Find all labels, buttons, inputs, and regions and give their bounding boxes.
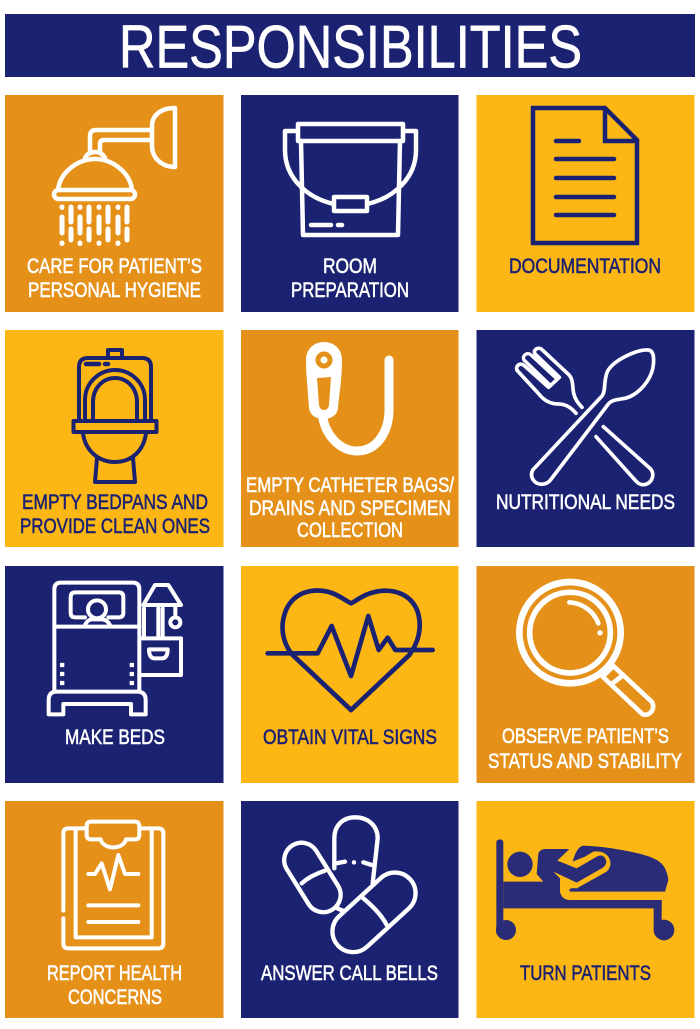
icon: clipboard xyxy=(63,822,163,948)
label: PROVIDE CLEAN ONES xyxy=(20,515,210,538)
panel: room preparation xyxy=(241,95,458,312)
icon: catheter xyxy=(306,342,389,451)
panel: bedpans xyxy=(5,330,224,547)
panel: nutritional needs xyxy=(476,330,694,547)
icon: patient in bed xyxy=(496,839,674,940)
label: PREPARATION xyxy=(291,279,409,302)
panel: report health concerns xyxy=(5,801,224,1018)
label xyxy=(488,725,682,773)
icon: fork and spoon xyxy=(517,348,654,485)
label: CARE FOR PATIENT’S xyxy=(27,255,202,278)
label: EMPTY CATHETER BAGS/ xyxy=(246,474,454,497)
title banner xyxy=(5,14,695,80)
label xyxy=(291,255,409,302)
label: TURN PATIENTS xyxy=(520,962,651,985)
label: DOCUMENTATION xyxy=(509,255,661,278)
label xyxy=(47,962,182,1009)
label xyxy=(20,491,210,538)
panel: make beds xyxy=(5,566,224,783)
panel: observe patient xyxy=(476,566,694,783)
label: MAKE BEDS xyxy=(65,726,165,749)
label: CONCERNS xyxy=(68,986,162,1009)
label: DRAINS AND SPECIMEN xyxy=(249,497,451,520)
icon: heart with pulse xyxy=(268,591,433,710)
panel: turn patients xyxy=(476,801,694,1018)
label xyxy=(27,255,202,302)
label: PERSONAL HYGIENE xyxy=(28,279,201,302)
icon: pills xyxy=(278,817,424,961)
label: OBTAIN VITAL SIGNS xyxy=(263,726,437,749)
icon: bucket xyxy=(285,124,416,235)
label: EMPTY BEDPANS AND xyxy=(22,491,208,514)
icon: magnifying glass xyxy=(519,582,653,715)
icon: toilet xyxy=(74,350,156,482)
label: ROOM xyxy=(323,255,377,278)
panel: answer call bells xyxy=(241,801,458,1018)
icon: shower xyxy=(54,108,175,244)
panel: documentation xyxy=(476,95,694,312)
icon: document xyxy=(533,108,637,243)
label xyxy=(246,474,454,542)
label: COLLECTION xyxy=(297,519,403,542)
panel: vital signs xyxy=(241,566,458,783)
label: ANSWER CALL BELLS xyxy=(261,962,438,985)
panel: catheter bags xyxy=(241,330,458,547)
panel: personal hygiene xyxy=(5,95,224,312)
icon: bed with lamp xyxy=(49,583,181,714)
label: REPORT HEALTH xyxy=(47,962,182,985)
title text: RESPONSIBILITIES xyxy=(119,14,582,80)
